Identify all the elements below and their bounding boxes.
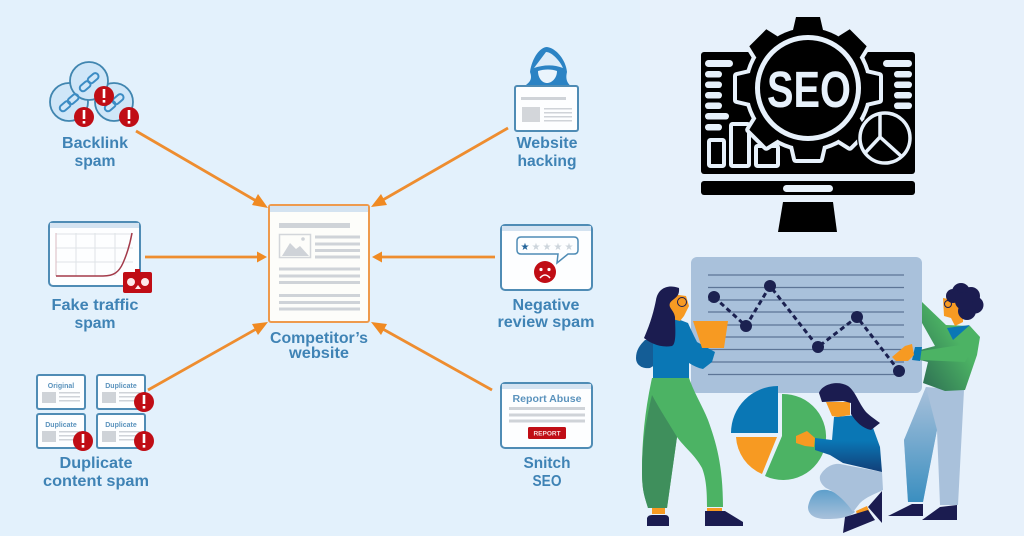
label: competitor's website line 2: website	[288, 345, 349, 362]
icon: negative review window	[501, 225, 592, 290]
icon: duplicate content pages: Duplicate	[45, 422, 77, 429]
illustration: standing woman	[636, 286, 743, 526]
label: website hacking: Website	[516, 135, 578, 152]
arrow: hacking to competitor	[371, 128, 508, 207]
label: duplicate content spam line 2: content spam	[43, 473, 149, 490]
illustration: line chart board	[691, 257, 922, 393]
icon: negative review window: ★	[554, 242, 563, 253]
panel: competitor website page	[269, 205, 369, 322]
illustration: standing man	[888, 283, 984, 520]
icon: backlink spam	[50, 62, 139, 127]
icon: negative review window: ★	[543, 242, 552, 253]
arrow: negative review to competitor	[372, 252, 495, 262]
icon: duplicate content pages: Duplicate	[105, 422, 137, 429]
icon: report abuse window: Report Abuse	[512, 393, 582, 405]
label: backlink spam: Backlink	[62, 135, 128, 152]
icon: report abuse window	[501, 383, 592, 448]
icon: duplicate content pages: Original	[48, 383, 74, 390]
arrow: backlink to competitor	[136, 131, 268, 208]
SEO text: SEO	[767, 61, 851, 118]
icon: website hacking	[515, 47, 578, 131]
small pie on screen	[857, 110, 913, 166]
icon: negative review window: ★	[565, 242, 574, 253]
label: snitch SEO: Snitch	[524, 455, 570, 472]
icon: red robot	[123, 269, 152, 293]
icon: negative review window: ★	[532, 242, 541, 253]
label: backlink spam line 2: spam	[74, 153, 116, 170]
illustration: pie chart	[731, 386, 826, 480]
icon: fake traffic chart window	[49, 222, 140, 286]
label: snitch SEO line 2: SEO	[532, 473, 562, 490]
label: website hacking line 2: hacking	[518, 153, 576, 170]
label: fake traffic spam: Fake traffic	[52, 297, 139, 314]
label: competitor's website: Competitor’s	[270, 330, 368, 347]
arrow: snitch to competitor	[371, 322, 492, 390]
label: duplicate content spam: Duplicate	[60, 455, 133, 472]
gear	[737, 17, 879, 159]
icon: negative review window: ★	[521, 242, 530, 253]
icon: duplicate content pages: Duplicate	[105, 383, 137, 390]
label: negative review spam: Negative	[512, 297, 580, 314]
icon: duplicate content pages	[37, 375, 154, 451]
label: fake traffic spam line 2: spam	[74, 315, 116, 332]
icon: report abuse window: REPORT	[533, 430, 561, 438]
illustration: crouching woman	[796, 383, 883, 533]
label: negative review spam line 2: review spam	[498, 314, 594, 331]
arrow: fake traffic to competitor	[145, 252, 267, 262]
icon: SEO monitor	[701, 17, 915, 232]
arrow: duplicate to competitor	[148, 322, 268, 390]
gear halo	[737, 17, 879, 159]
